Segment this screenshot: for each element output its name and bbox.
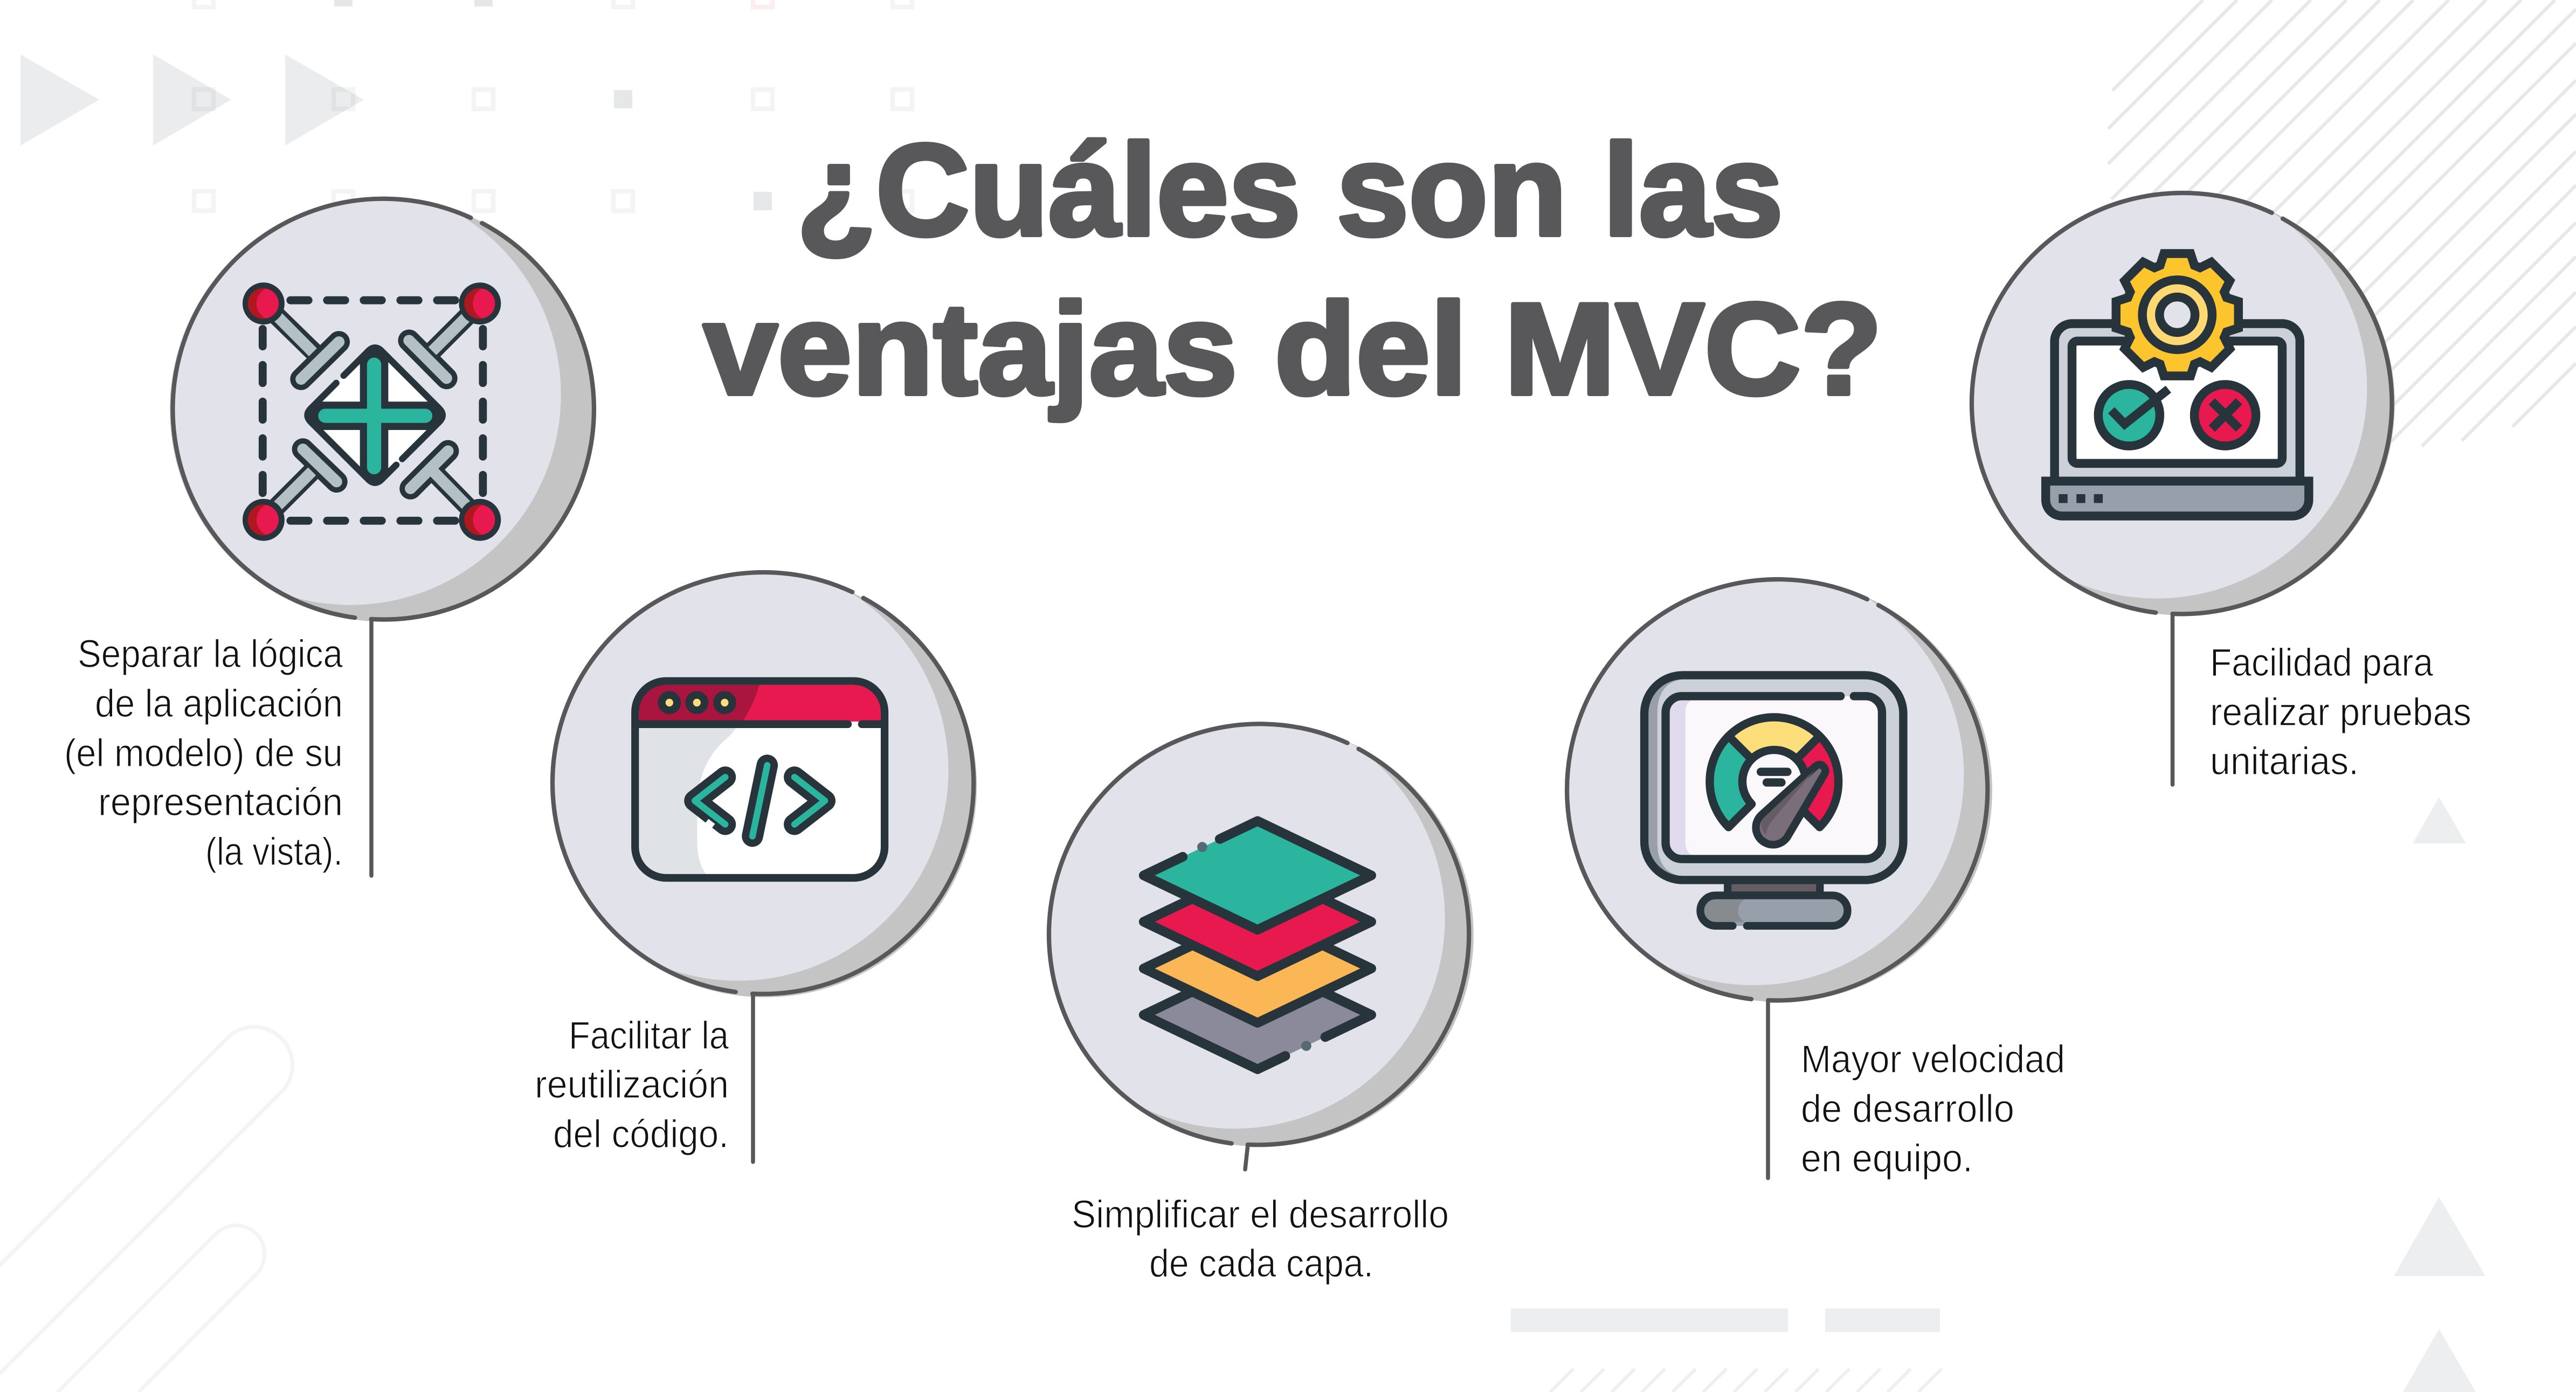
text: separar la lógica: Separar la lógica xyxy=(78,633,343,676)
leader line 5 xyxy=(2171,614,2174,785)
text: mayor velocidad: Mayor velocidad xyxy=(1801,1038,2065,1081)
text: mayor velocidad: en equipo. xyxy=(1801,1137,1973,1180)
text: simplificar el desarrollo xyxy=(1072,1193,1449,1285)
text: facilitar la reutilización xyxy=(535,1014,729,1156)
text: separar la lógica: (la vista). xyxy=(205,830,343,874)
badge circle 3 xyxy=(1024,708,1474,1147)
panel: step 3 capas xyxy=(1024,708,1474,1285)
title: ventajas del MVC? xyxy=(703,276,1882,422)
badge circle 4 xyxy=(1543,564,1992,1002)
icon: laptop with gear xyxy=(2046,254,2309,516)
text: facilidad para pruebas: unitarias. xyxy=(2210,740,2359,783)
icon: code window xyxy=(635,681,885,878)
panel: step 4 velocidad xyxy=(1543,564,2065,1180)
leader line 3 xyxy=(1245,1145,1248,1169)
text: facilitar la reutilización: reutilización xyxy=(535,1063,729,1106)
text: facilidad para pruebas xyxy=(2210,641,2471,783)
leader line 4 xyxy=(1766,1000,1770,1178)
badge circle 2 xyxy=(528,560,977,998)
title: ¿Cuáles son las xyxy=(797,117,1783,263)
panel: step 1 separar la lógica xyxy=(64,184,595,876)
badge circle 5 xyxy=(1946,178,2395,615)
text: mayor velocidad xyxy=(1801,1038,2065,1180)
title xyxy=(703,117,1882,422)
text: facilidad para pruebas: realizar pruebas xyxy=(2210,691,2471,734)
text: facilidad para pruebas: Facilidad para xyxy=(2210,641,2434,684)
text: simplificar el desarrollo: de cada capa. xyxy=(1149,1242,1373,1285)
text: separar la lógica: de la aplicación xyxy=(95,682,343,725)
leader line 1 xyxy=(369,619,374,876)
icon: separation diagram xyxy=(245,286,498,538)
icon: speedometer monitor xyxy=(1645,675,1903,926)
text: separar la lógica: (el modelo) de su xyxy=(64,732,343,775)
panel: step 2 reutilización xyxy=(528,560,977,1162)
text: facilitar la reutilización: Facilitar la xyxy=(569,1014,729,1057)
text: separar la lógica xyxy=(64,633,343,874)
text: facilitar la reutilización: del código. xyxy=(553,1113,729,1156)
text: simplificar el desarrollo: Simplificar el desarrollo xyxy=(1072,1193,1449,1236)
leader line 2 xyxy=(751,994,755,1162)
badge circle 1 xyxy=(140,184,595,621)
panel: step 5 pruebas unitarias xyxy=(1946,178,2471,785)
icon: stacked layers xyxy=(1144,821,1371,1069)
text: separar la lógica: representación xyxy=(98,781,343,824)
text: mayor velocidad: de desarrollo xyxy=(1801,1088,2014,1131)
